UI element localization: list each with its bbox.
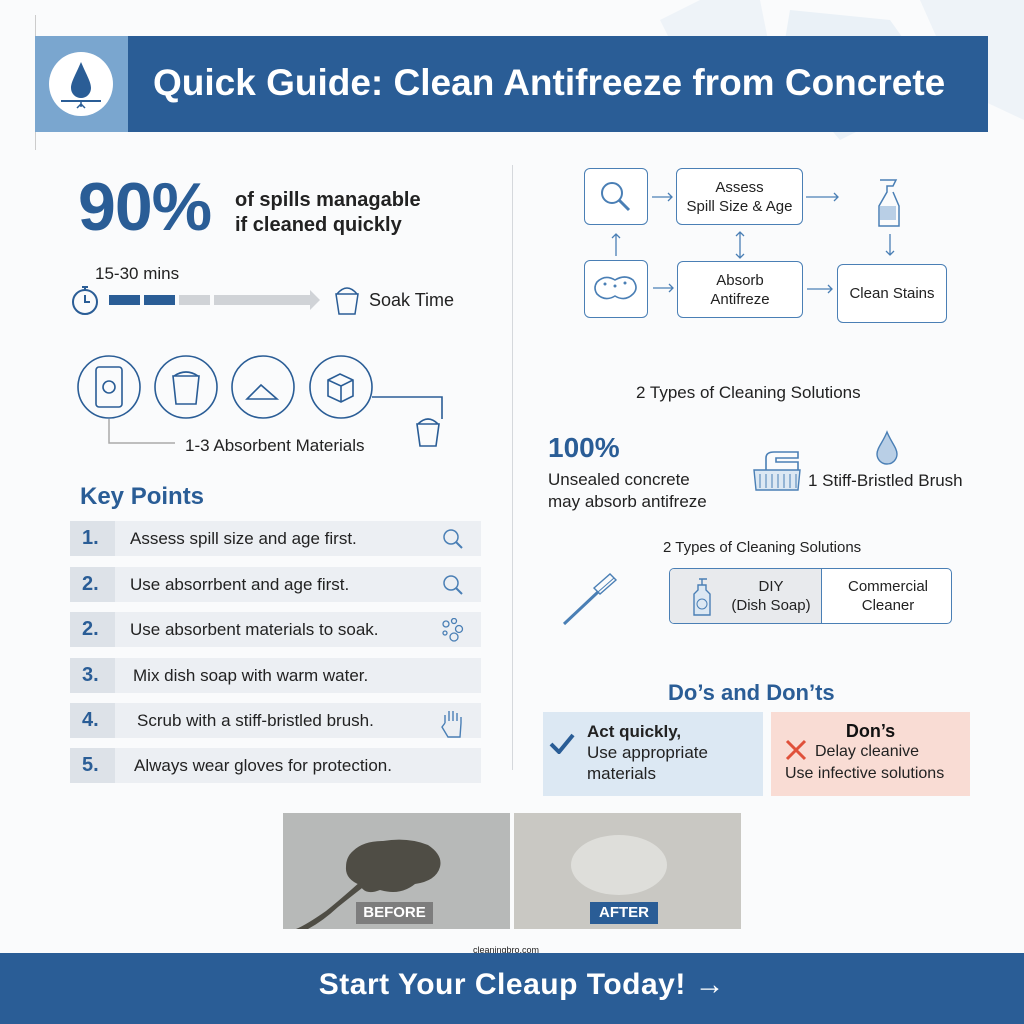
- icon: scrub brush: [753, 451, 801, 491]
- heading: 2 types: 2 Types of Cleaning Solutions: [636, 383, 861, 402]
- box: absorb: [677, 261, 803, 318]
- icon: stopwatch: [72, 286, 98, 315]
- title: Quick Guide: Clean Antifreeze from Concrete: [153, 62, 945, 103]
- stat: 90%: of spills managable: [235, 189, 421, 211]
- photo: after: AFTER: [599, 904, 649, 921]
- box: clean stains: [837, 264, 947, 323]
- soak time timeline: [72, 264, 454, 315]
- flowchart: [584, 168, 947, 323]
- footer banner: Start Your Cleaup Today! →: [319, 968, 725, 1001]
- photo: before: [283, 813, 510, 929]
- DIY cell: (Dish Soap): [731, 597, 811, 614]
- footer banner: [0, 953, 1024, 1024]
- point 5: 5.: [82, 754, 99, 776]
- point 4: [70, 703, 481, 738]
- box: absorb: Antifreze: [710, 290, 770, 308]
- panel: dos: [543, 712, 763, 796]
- soak time timeline: Soak Time: [369, 290, 454, 310]
- icon: drop: [876, 430, 898, 465]
- stat: 90%: if cleaned quickly: [235, 214, 402, 236]
- point 5: [70, 748, 481, 783]
- point 3: [70, 658, 481, 693]
- divider lines: [35, 15, 36, 150]
- soak time timeline: 15-30 mins: [95, 264, 179, 283]
- box: clean stains: Clean Stains: [849, 285, 935, 302]
- point 2: 2.: [82, 573, 99, 595]
- point 2b: 2.: [82, 618, 99, 640]
- commercial cell: Commercial: [848, 578, 928, 595]
- stat: 100%: [548, 432, 707, 511]
- photo: before: BEFORE: [363, 904, 426, 921]
- box: absorb: Absorb: [716, 272, 764, 288]
- point 1: Assess spill size and age first.: [130, 529, 357, 548]
- panel: dos: materials: [587, 764, 656, 783]
- panel: donts: Delay cleanive: [815, 743, 919, 760]
- panel: donts: Don’s: [846, 721, 895, 741]
- point 4: 4.: [82, 709, 99, 731]
- box: assess: Spill Size & Age: [687, 198, 792, 214]
- point 1: 1.: [82, 527, 99, 549]
- subheading: 2 types: 2 Types of Cleaning Solutions: [663, 539, 861, 556]
- stat: 100%: Unsealed concrete: [548, 470, 690, 489]
- photo: after: [514, 813, 741, 929]
- panel: dos: Use appropriate: [587, 743, 708, 762]
- point 2: Use absorrbent and age first.: [130, 575, 349, 594]
- point 1: [70, 521, 481, 556]
- stat: 100%: 100%: [548, 432, 620, 463]
- stat: 90%: 90%: [78, 169, 211, 245]
- decorative background shapes: [660, 0, 1024, 140]
- header banner: [35, 36, 988, 132]
- DIY cell: DIY: [758, 578, 784, 595]
- heading: Key Points: Key Points: [80, 483, 204, 510]
- brush item: [753, 430, 963, 491]
- panel: donts: Use infective solutions: [785, 765, 944, 782]
- brush item: 1 Stiff-Bristled Brush: [808, 471, 963, 490]
- point 2b: [70, 612, 481, 647]
- commercial cell: Cleaner: [862, 597, 914, 614]
- commercial cell: [848, 578, 928, 614]
- icon: spray bottle: [878, 179, 900, 227]
- icon: bucket: [335, 287, 359, 315]
- box: sponge: [584, 260, 648, 318]
- point 2b: Use absorbent materials to soak.: [130, 620, 379, 639]
- box: magnifier: [584, 168, 648, 225]
- point 4: Scrub with a stiff-bristled brush.: [137, 711, 374, 730]
- solutions table: [669, 568, 952, 624]
- panel: dos: Act quickly,: [587, 722, 681, 741]
- absorbent materials icons: [77, 355, 443, 455]
- key points list: [70, 521, 481, 783]
- DIY cell: [670, 569, 822, 625]
- point 3: Mix dish soap with warm water.: [133, 666, 368, 685]
- absorbent materials icons: 1-3 Absorbent Materials: [185, 436, 365, 455]
- source text: cleaningbro.com: [473, 945, 539, 955]
- stat: 90%: [78, 169, 421, 245]
- header icon tab: [35, 36, 128, 132]
- icon: long brush: [563, 573, 617, 626]
- point 3: 3.: [82, 664, 99, 686]
- stat: 100%: may absorb antifreze: [548, 492, 707, 511]
- point 5: Always wear gloves for protection.: [134, 756, 392, 775]
- heading: dos and donts: Do’s and Don’ts: [668, 680, 835, 705]
- box: assess: [676, 168, 803, 225]
- icon: drop on surface: [49, 52, 113, 116]
- box: assess: Assess: [715, 178, 764, 196]
- panel: donts: [771, 712, 970, 796]
- point 2: [70, 567, 481, 602]
- arrows: [612, 192, 894, 294]
